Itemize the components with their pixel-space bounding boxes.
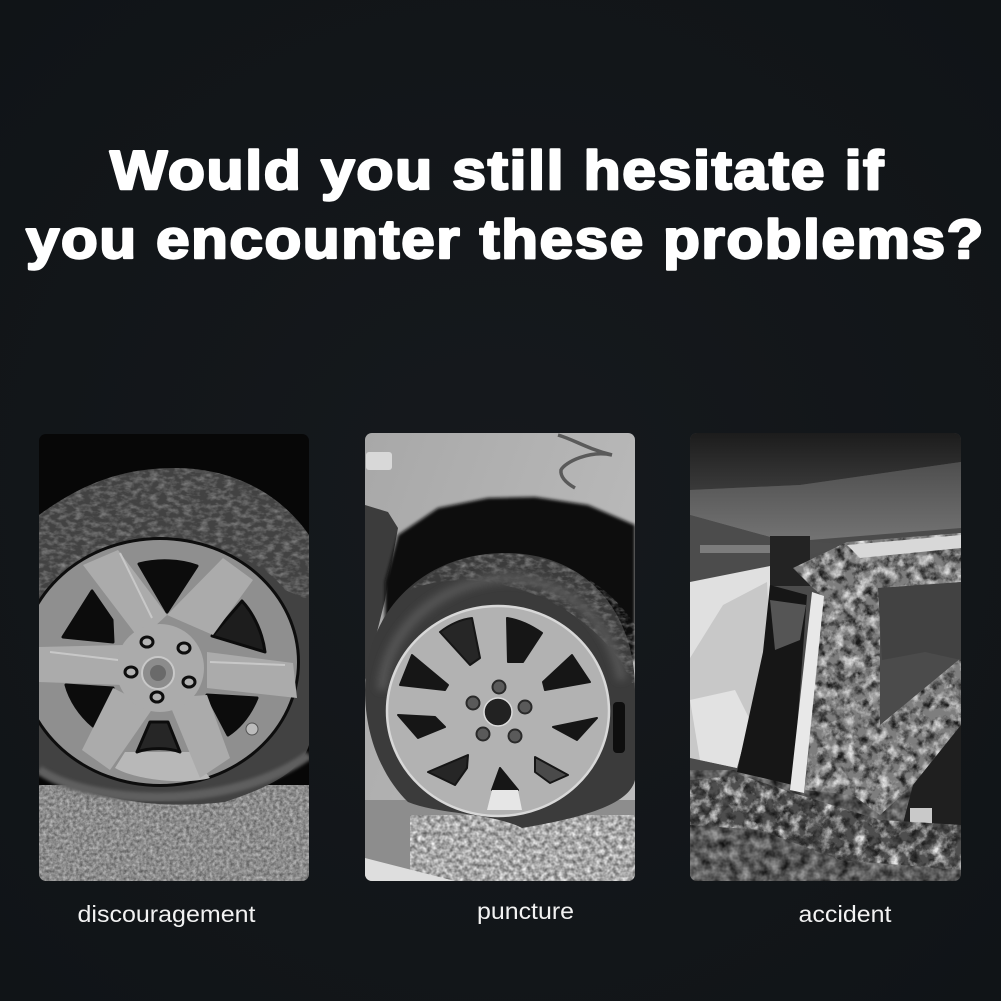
valve xyxy=(246,723,258,735)
lower left bodywork xyxy=(365,505,398,680)
tyre xyxy=(365,553,635,828)
label: discouragement: discouragement xyxy=(78,901,256,927)
rim xyxy=(387,606,609,816)
scratch xyxy=(558,435,612,488)
spoke highlights xyxy=(50,553,285,665)
burnt car: cavity xyxy=(737,585,807,785)
burnt car: lower right dark xyxy=(904,725,961,825)
spokes xyxy=(39,550,297,778)
panel: accident photo xyxy=(690,433,961,881)
background wall xyxy=(690,566,770,658)
title xyxy=(26,139,985,270)
burnt car: white pillar xyxy=(790,592,824,793)
slot xyxy=(613,702,625,753)
ceiling xyxy=(690,433,961,490)
car body xyxy=(365,433,635,881)
burnt car: dark upper right xyxy=(878,582,961,660)
hub xyxy=(142,657,174,689)
ground xyxy=(39,785,309,881)
title: you encounter these problems? xyxy=(26,208,985,270)
title: Would you still hesitate if xyxy=(110,139,885,201)
pillar shadow xyxy=(770,536,810,586)
burnt car: wreck xyxy=(790,533,961,823)
panel: discouragement photo xyxy=(20,434,309,881)
panel: puncture photo xyxy=(365,433,635,881)
rim openings xyxy=(63,561,265,752)
ground xyxy=(365,800,635,881)
bright inner rim xyxy=(487,790,522,810)
road stripe xyxy=(365,858,455,881)
badge xyxy=(366,452,392,470)
hub xyxy=(484,698,512,726)
gravel xyxy=(410,815,635,881)
tyre xyxy=(39,468,309,805)
burnt car: roof highlights xyxy=(847,535,961,558)
rim openings xyxy=(398,618,597,790)
burnt car: left door xyxy=(690,582,770,768)
label: accident: accident xyxy=(798,901,892,927)
label: puncture: puncture xyxy=(477,898,574,924)
debris xyxy=(690,775,961,870)
rim xyxy=(20,537,300,787)
wheel arch xyxy=(385,497,635,660)
ground xyxy=(690,770,961,881)
